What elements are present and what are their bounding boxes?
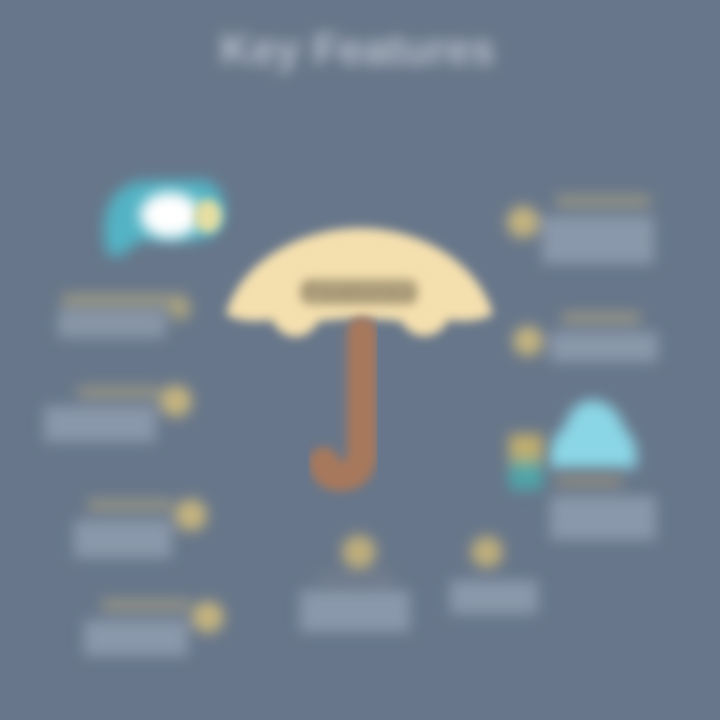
feature: left 1: Feature one [62, 292, 187, 308]
feature: left 3 [74, 497, 207, 558]
feature: left 4: Feature four [102, 597, 191, 613]
umbrella handle [324, 332, 362, 476]
feature: right 3: Feature seven [556, 473, 622, 489]
umbrella canopy [226, 228, 493, 337]
icon: cloud and sun, upper left [104, 180, 224, 256]
icon: stacked blocks, right [509, 434, 543, 490]
feature: right 2: Feature six [562, 310, 640, 326]
feature: right 3 [550, 473, 656, 540]
feature: left 1 [58, 292, 191, 338]
title: Key Features [220, 25, 495, 74]
feature: right 1: Feature five [556, 193, 650, 209]
feature: left 2: Feature two [78, 384, 160, 400]
feature: right 1 [507, 193, 654, 264]
feature: bottom right [450, 536, 538, 614]
icon: cloud, right [549, 400, 637, 468]
feature: bottom centre: Feature eight [318, 571, 394, 585]
central umbrella [226, 228, 493, 476]
feature: left 3: Feature three [88, 497, 173, 513]
feature: left 4 [84, 597, 224, 656]
feature: left 2 [44, 384, 192, 442]
umbrella label: Features [304, 279, 414, 304]
feature: bottom centre [300, 535, 410, 632]
feature: right 2 [513, 310, 658, 362]
